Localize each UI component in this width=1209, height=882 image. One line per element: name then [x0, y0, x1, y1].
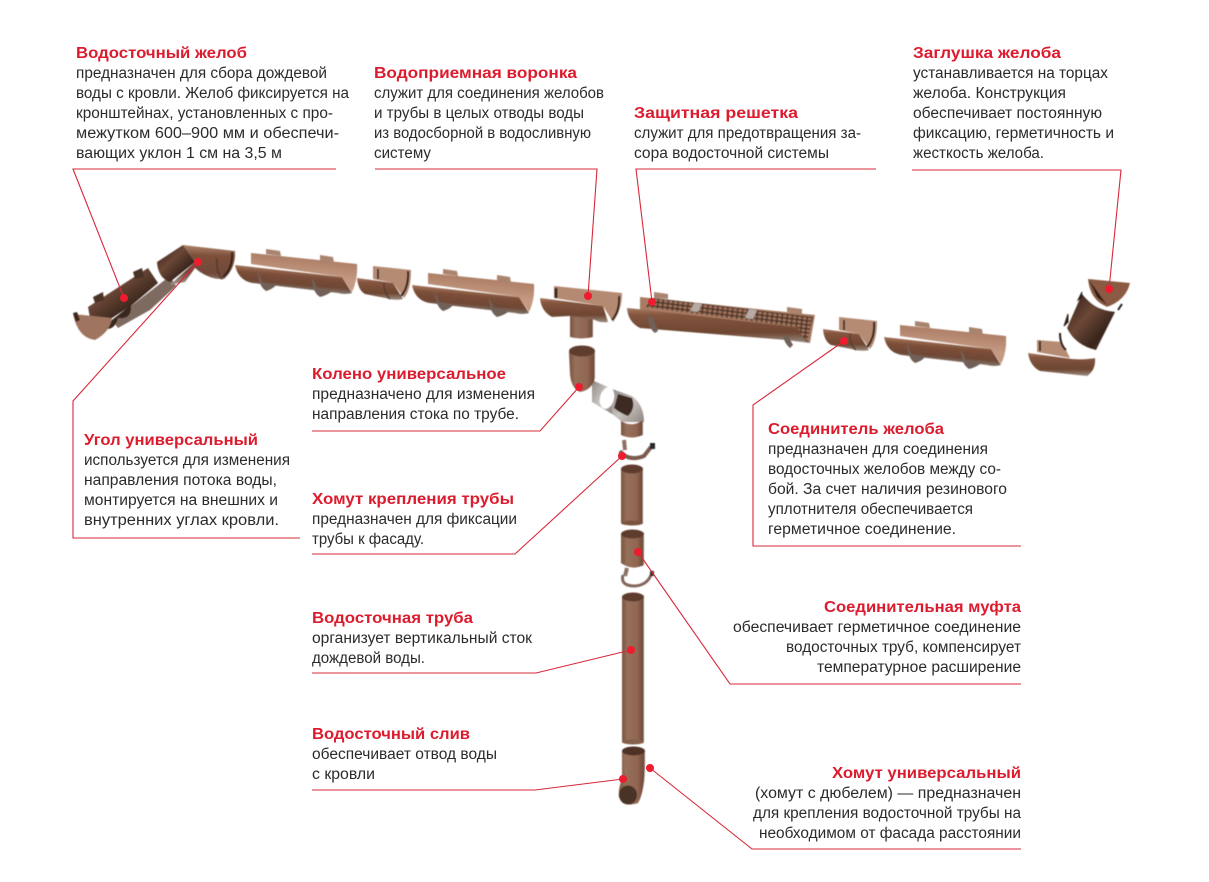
description: направления стока по трубе. — [312, 406, 519, 423]
description: служит для предотвращения за- — [634, 125, 861, 142]
description: фиксацию, герметичность и — [913, 125, 1114, 142]
leader line — [312, 779, 623, 790]
heading: Угол универсальный — [84, 432, 258, 449]
leader line — [638, 552, 1021, 684]
description: уплотнителя обеспечивается — [768, 501, 973, 518]
leader line — [312, 650, 631, 673]
description — [753, 785, 1021, 842]
description: трубы к фасаду. — [312, 531, 424, 548]
illustration: downpipe assembly — [569, 346, 655, 805]
gutter connector 1 — [357, 266, 411, 300]
callout: Заглушка желоба — [912, 45, 1121, 293]
description: организует вертикальный сток — [312, 630, 532, 647]
description: обеспечивает герметичное соединение — [733, 619, 1021, 636]
description: для крепления водосточной трубы на — [753, 805, 1021, 822]
description: вающих уклон 1 см на 3,5 м — [76, 145, 282, 162]
description — [374, 85, 604, 162]
heading: Защитная решетка — [634, 105, 798, 122]
gutter with protective grid — [627, 292, 815, 348]
callout: Водосточный слив — [312, 726, 627, 790]
description: устанавливается на торцах — [913, 65, 1108, 82]
description — [312, 386, 535, 423]
callout: Соединитель желоба — [753, 337, 1021, 546]
left gutter end with cap — [73, 268, 176, 340]
marker — [634, 548, 642, 556]
description — [312, 511, 517, 548]
callout: Хомут крепления трубы — [312, 452, 626, 554]
heading: Хомут универсальный — [832, 765, 1021, 782]
leader line — [312, 456, 622, 554]
description: предназначено для изменения — [312, 386, 535, 403]
description — [312, 746, 497, 783]
marker — [194, 258, 202, 266]
description: используется для изменения — [84, 452, 290, 469]
description: (хомут с дюбелем) — предназначен — [755, 785, 1021, 802]
description: обеспечивает постоянную — [913, 105, 1102, 122]
heading: Водоприемная воронка — [374, 65, 577, 82]
right gutter end with cap — [1028, 279, 1130, 376]
heading: Соединитель желоба — [768, 421, 944, 438]
leader line — [753, 341, 1021, 546]
gutter section 1 — [235, 249, 357, 297]
description: жесткость желоба. — [913, 145, 1044, 162]
leader line — [912, 170, 1121, 289]
callout: Защитная решетка — [634, 105, 876, 306]
marker — [840, 337, 848, 345]
description: обеспечивает отвод воды — [312, 746, 497, 763]
description: предназначен для соединения — [768, 441, 988, 458]
description: из водосборной в водосливную — [374, 125, 591, 142]
pipe clamp lower — [622, 568, 654, 586]
description: с кровли — [312, 766, 375, 783]
illustration: exploded gutter run — [73, 245, 1130, 376]
short pipe — [621, 464, 643, 526]
callout: Водоприемная воронка — [374, 65, 604, 300]
callout: Колено универсальное — [312, 366, 583, 431]
heading: Заглушка желоба — [913, 45, 1061, 62]
marker — [646, 764, 654, 772]
heading: Хомут крепления трубы — [312, 491, 514, 508]
leader line — [73, 169, 336, 298]
description: монтируется на внешних и — [84, 492, 278, 509]
description — [84, 452, 290, 529]
description: водосточных желобов между со- — [768, 461, 1001, 478]
marker — [627, 646, 635, 654]
outer corner piece — [157, 245, 235, 285]
description: кронштейнах, установленных с про- — [76, 105, 333, 122]
description: бой. За счет наличия резинового — [768, 481, 1007, 498]
description: межутком 600–900 мм и обеспечи- — [76, 125, 339, 142]
heading: Колено универсальное — [312, 366, 506, 383]
description — [913, 65, 1114, 162]
marker — [648, 298, 656, 306]
callout: Водосточный желоб — [73, 45, 349, 302]
heading: Соединительная муфта — [824, 599, 1021, 616]
coupling — [621, 530, 644, 568]
description: герметичное соединение. — [768, 521, 956, 538]
description: направления потока воды, — [84, 472, 277, 489]
description: температурное расширение — [817, 659, 1021, 676]
leader line — [73, 262, 300, 538]
description: предназначен для фиксации — [312, 511, 517, 528]
description — [76, 65, 349, 162]
knee elbow — [569, 346, 644, 438]
heading: Водосточная труба — [312, 610, 473, 627]
callout: Соединительная муфта — [634, 548, 1021, 684]
description: сора водосточной системы — [634, 145, 829, 162]
water funnel — [540, 286, 622, 338]
description — [634, 125, 861, 162]
description: служит для соединения желобов — [374, 85, 604, 102]
water outlet — [619, 746, 645, 805]
gutter connector 2 — [823, 317, 877, 351]
description: и трубы в целых отводы воды — [374, 105, 584, 122]
leader line — [375, 169, 597, 296]
heading: Водосточный желоб — [76, 45, 247, 62]
callout: Угол универсальный — [73, 258, 300, 538]
leader line — [312, 387, 579, 431]
description: необходимом от фасада расстоянии — [759, 825, 1021, 842]
description: внутренних углах кровли. — [84, 512, 279, 529]
marker — [618, 452, 626, 460]
pipe clamp upper — [620, 440, 655, 458]
gutter section 3 — [884, 321, 1006, 369]
description — [312, 630, 532, 667]
heading: Водосточный слив — [312, 726, 470, 743]
description: водосточных труб, компенсирует — [786, 639, 1021, 656]
gutter section 2 — [412, 269, 534, 317]
leader line — [650, 768, 1021, 849]
description: воды с кровли. Желоб фиксируется на — [76, 85, 349, 102]
marker — [619, 775, 627, 783]
description: предназначен для сбора дождевой — [76, 65, 327, 82]
description: желоба. Конструкция — [913, 85, 1066, 102]
marker — [120, 294, 128, 302]
description — [768, 441, 1007, 538]
marker — [1105, 285, 1113, 293]
description: дождевой воды. — [312, 650, 425, 667]
description: систему — [374, 145, 431, 162]
leader line — [636, 169, 876, 302]
marker — [575, 383, 583, 391]
callout: Хомут универсальный — [646, 764, 1021, 849]
marker — [584, 292, 592, 300]
description — [733, 619, 1021, 676]
long downpipe — [622, 592, 644, 744]
callout: Водосточная труба — [312, 610, 635, 673]
